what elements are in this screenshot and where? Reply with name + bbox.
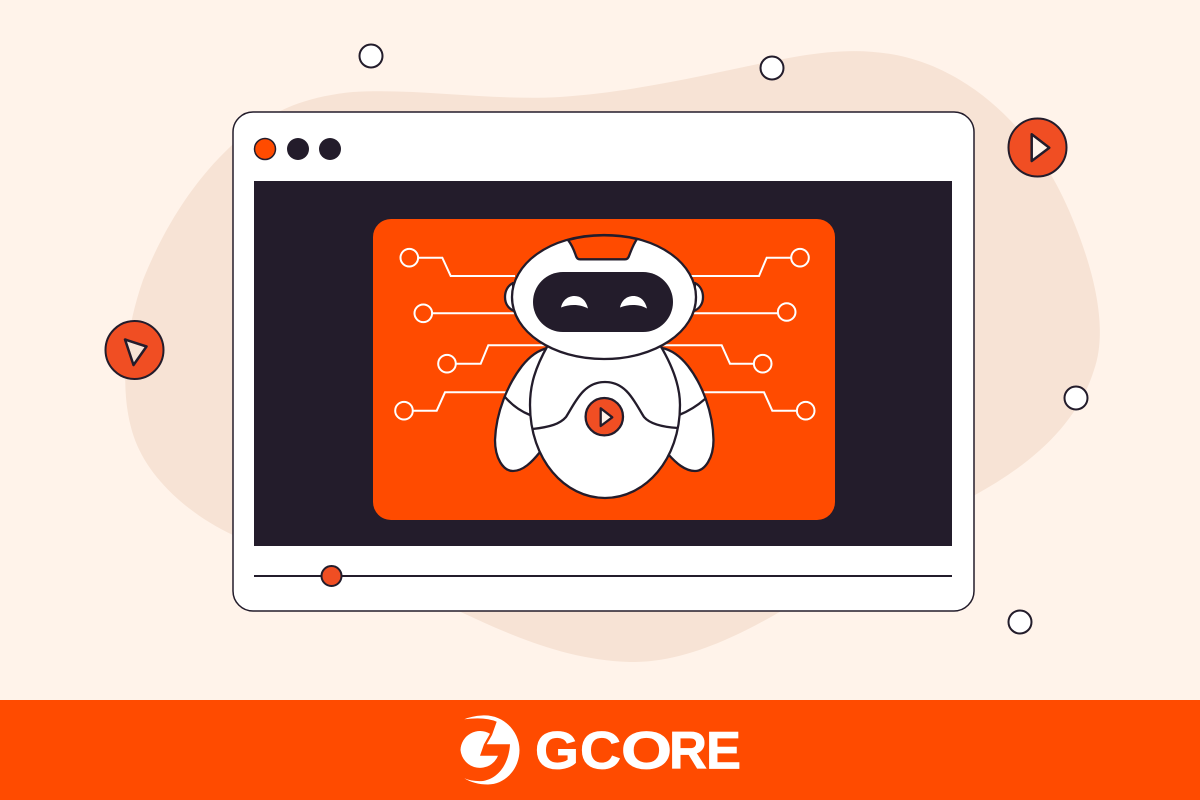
logo wordmark bbox=[535, 722, 741, 780]
icon: play button left bbox=[106, 321, 164, 379]
background blob bbox=[125, 51, 1100, 662]
panel: video player window bbox=[233, 112, 974, 611]
decorative circle top right bbox=[760, 56, 784, 80]
decorative circle bottom right bbox=[1008, 610, 1032, 634]
logo wordmark: E bbox=[706, 722, 741, 780]
decorative circle right bbox=[1064, 386, 1088, 410]
robot left ear bbox=[505, 283, 514, 311]
footer band bbox=[0, 700, 1200, 800]
robot visor bbox=[533, 272, 673, 332]
head top plate bbox=[568, 235, 637, 259]
video screen bbox=[254, 181, 952, 546]
robot head bbox=[512, 235, 696, 359]
robot right arm bbox=[662, 348, 714, 471]
logo wordmark: C bbox=[580, 722, 621, 780]
icon: chest play button bbox=[586, 398, 623, 435]
logo wordmark: R bbox=[669, 722, 707, 780]
circuit lines left bbox=[395, 249, 550, 420]
icon: play button right bbox=[1008, 118, 1066, 176]
robot left arm bbox=[495, 348, 548, 471]
robot bbox=[495, 235, 714, 498]
circuit lines right bbox=[655, 249, 814, 420]
logo wordmark: G bbox=[535, 722, 579, 780]
orange video thumbnail bbox=[373, 219, 835, 520]
robot right eye bbox=[620, 296, 647, 308]
logo bbox=[460, 715, 741, 784]
robot right ear bbox=[694, 283, 703, 311]
body seams bbox=[505, 382, 705, 429]
decorative circle top left bbox=[360, 44, 382, 68]
window control dots bbox=[254, 138, 341, 160]
logo mark bbox=[460, 715, 520, 784]
logo wordmark: O bbox=[621, 722, 672, 780]
robot body bbox=[530, 345, 680, 498]
robot left eye bbox=[561, 296, 588, 308]
progress bar knob bbox=[322, 566, 342, 586]
progress bar track bbox=[254, 575, 952, 577]
